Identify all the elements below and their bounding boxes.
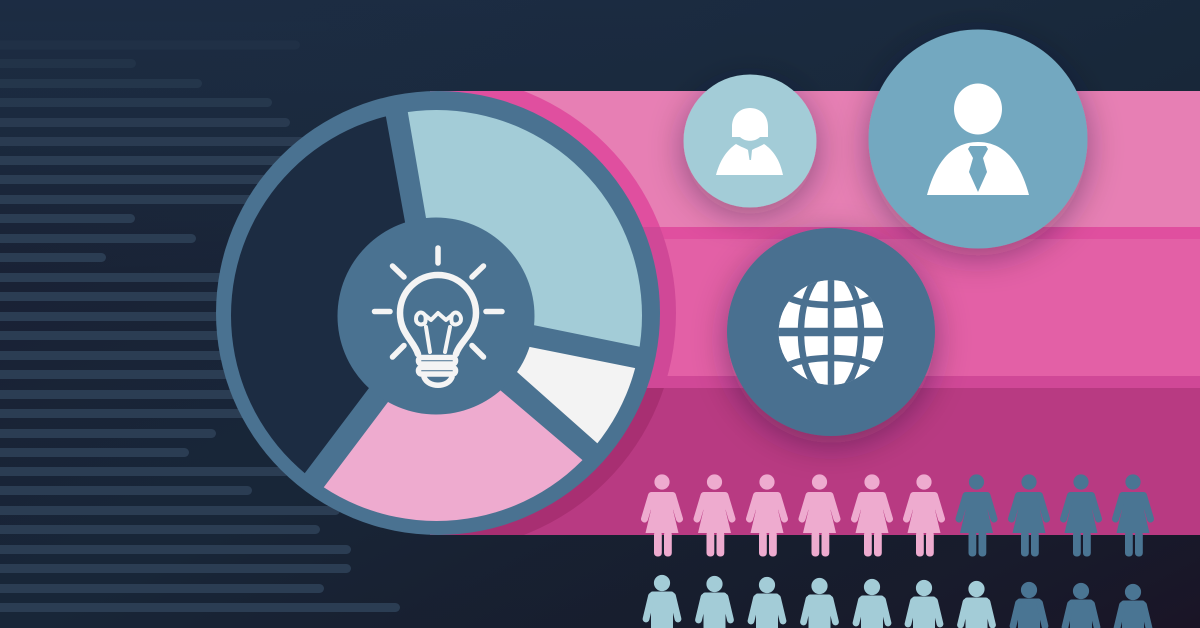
segment: pink — [324, 390, 582, 521]
pink stacked bands — [430, 91, 1200, 535]
circle: woman avatar — [684, 74, 816, 208]
woman 9 blue — [1064, 474, 1098, 556]
segment: light blue — [408, 110, 642, 347]
man 4 light — [804, 578, 836, 628]
man 6 light — [908, 580, 940, 628]
icon: businessman — [927, 84, 1029, 195]
icon: globe — [778, 280, 884, 385]
halo ring: bottom — [430, 388, 664, 535]
pie ring — [216, 91, 660, 535]
woman 3 pink — [750, 474, 784, 556]
man 2 light — [698, 576, 730, 628]
segment: white — [517, 346, 636, 444]
halo ring: middle — [643, 227, 676, 376]
man 5 light — [856, 579, 888, 628]
woman 8 blue — [1012, 474, 1046, 556]
man 8 blue — [1013, 582, 1045, 628]
segment: dark navy — [231, 116, 405, 474]
band: bottom — [438, 388, 1200, 535]
band: middle separator — [438, 376, 1200, 388]
background horizontal bars — [0, 22, 400, 612]
woman 5 pink — [854, 474, 890, 556]
woman 10 blue — [1116, 474, 1150, 556]
pie hub — [338, 218, 534, 414]
man 7 light — [960, 581, 992, 628]
woman 7 blue — [959, 474, 994, 556]
woman 6 pink — [906, 474, 942, 556]
icon: woman — [716, 108, 783, 175]
man 10 blue — [1117, 584, 1149, 628]
man 1 light — [646, 575, 678, 628]
halo ring: top — [430, 91, 660, 227]
man 9 blue — [1065, 583, 1097, 628]
circle: man avatar — [868, 30, 1088, 248]
band: top separator — [438, 227, 1200, 239]
band: top — [438, 91, 1200, 227]
band: middle — [438, 239, 1200, 376]
icon: light bulb — [374, 248, 502, 385]
woman 2 pink — [697, 474, 732, 556]
circle: globe — [727, 228, 935, 436]
woman 4 pink — [802, 474, 837, 556]
man 3 light — [751, 577, 783, 628]
woman 1 pink — [644, 474, 680, 556]
people row: women — [644, 474, 1150, 556]
people row: men — [646, 575, 1149, 628]
donut pie chart — [216, 91, 660, 535]
